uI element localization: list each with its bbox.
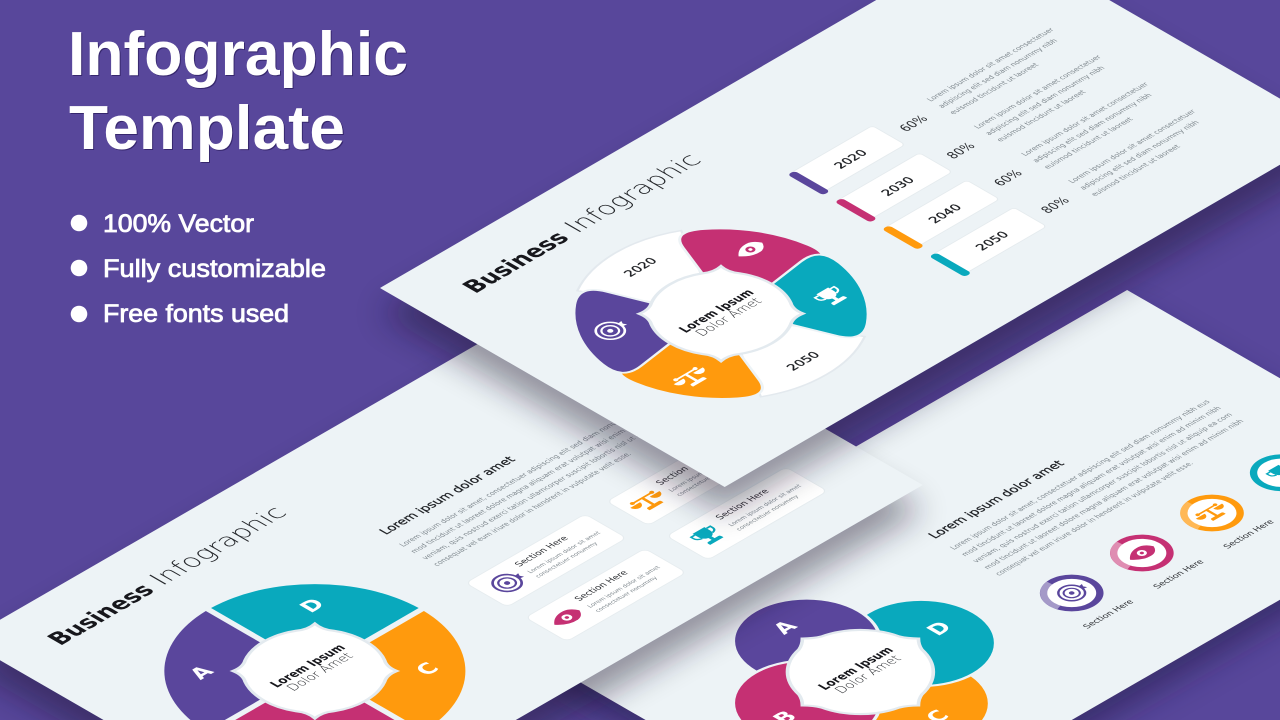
row: 2020 xyxy=(788,25,1082,195)
body text: consequat vel eum iriure dolor in hendrerit in vulputate velit esse. xyxy=(993,460,1196,577)
slide title: Business xyxy=(456,228,576,297)
body text: mod tincidunt ut laoreet dolore magna aliquam erat volutpat wisi enim ad minim nibh xyxy=(408,402,673,555)
feature list: 100% Vector xyxy=(103,210,254,238)
flower diagram: D xyxy=(921,618,957,639)
row: 2050: 80% xyxy=(1038,195,1074,216)
petal: target xyxy=(560,281,688,377)
row: 2050: Lorem ipsum dolor sit amet consectetuer xyxy=(1066,108,1198,184)
card: eye xyxy=(525,548,686,642)
sector wheel xyxy=(102,548,528,720)
row: 2040: Lorem ipsum dolor sit amet consectetuer xyxy=(1019,81,1151,157)
row: 2020: 2020 xyxy=(831,148,871,171)
row: 2020: adipiscing elit sed diam nonummy nibh xyxy=(936,37,1060,109)
row: 2040: euismod tincidunt ut laoreet xyxy=(1042,116,1135,170)
row: 2030: euismod tincidunt ut laoreet xyxy=(994,89,1088,143)
card: target: Section Here xyxy=(513,535,572,569)
row: 2050: euismod tincidunt ut laoreet xyxy=(1089,143,1182,197)
slide: sectors infographic (bottom left) xyxy=(0,286,923,720)
body text: consequat vel eum iriure dolor in hendrerit in vulputate velit esse. xyxy=(431,450,634,568)
petal: scale xyxy=(612,333,778,407)
row: 2040: adipiscing elit sed diam nonummy nibh xyxy=(1030,92,1154,164)
body text: veniam, quis nostrud exerci tation ullamcorper suscipit lobortis nisl ut aliquip ea com xyxy=(420,408,684,561)
sector wheel: Dolor Amet xyxy=(284,651,357,694)
petal wheel xyxy=(500,185,942,442)
slide title xyxy=(39,502,294,649)
ring icon: target: Section Here xyxy=(1081,598,1137,631)
row: 2050: 2050 xyxy=(972,229,1012,252)
row: 2050 xyxy=(929,106,1224,277)
row: 2020: euismod tincidunt ut laoreet xyxy=(947,62,1041,116)
body text: mod tincidunt ut laoreet dolore magna aliquam erat volutpat wisi enim ad minim nibh xyxy=(959,405,1223,558)
body text: veniam, quis nostrud exerci tation ullamcorper suscipit lobortis nisl ut aliquip ea com xyxy=(970,411,1235,564)
card: target xyxy=(466,514,627,607)
feature list xyxy=(71,210,326,328)
ring icon: scale xyxy=(1166,486,1277,550)
feature list: Fully customizable xyxy=(103,255,326,283)
feature list: Free fonts used xyxy=(103,300,289,328)
sector wheel: Lorem Ipsum xyxy=(267,642,350,690)
body text: Lorem ipsum dolor sit amet, consectetuer adipiscing elit sed diam nonummy nibh eus xyxy=(397,395,661,548)
row: 2030: 2030 xyxy=(878,175,918,198)
flower diagram: Dolor Amet xyxy=(832,653,905,696)
slide shadow: bottom right xyxy=(514,310,1280,720)
row: 2030: adipiscing elit sed diam nonummy nibh xyxy=(983,65,1107,136)
ring icon: eye: Section Here xyxy=(1151,558,1207,591)
row: 2040: 2040 xyxy=(925,202,965,225)
slide: flower infographic (bottom right) xyxy=(514,290,1280,720)
card: target: consectetuer nonummy xyxy=(534,541,600,579)
card: trophy: Section Here xyxy=(714,488,773,522)
slide shadow: top xyxy=(380,0,1280,512)
petal wheel: 2020 xyxy=(621,256,660,279)
petal wheel: Lorem Ipsum xyxy=(676,288,758,335)
card: eye: consectetuer nonummy xyxy=(594,575,660,614)
petal wheel: Dolor Amet xyxy=(692,296,766,339)
card: eye: Section Here xyxy=(573,569,631,603)
flower diagram: Lorem Ipsum xyxy=(815,645,898,693)
row: 2030 xyxy=(835,52,1129,223)
flower diagram: A xyxy=(768,617,803,638)
petal: eye xyxy=(664,221,830,294)
ring icon: trophy xyxy=(1236,446,1280,510)
card: scale: consectetuer nonummy xyxy=(675,459,741,498)
flower diagram xyxy=(649,548,1076,720)
card: scale: Lorem ipsum dolor sit amet xyxy=(667,449,744,493)
card: trophy: consectetuer nonummy xyxy=(735,494,801,532)
slide shadow: bottom left xyxy=(0,311,923,720)
ring icon: eye xyxy=(1096,526,1207,590)
heading: Lorem ipsum dolor amet xyxy=(924,458,1067,541)
row: 2030: 80% xyxy=(944,141,979,161)
slide: petal infographic (top) xyxy=(380,0,1280,487)
row: 2030: Lorem ipsum dolor sit amet consectetuer xyxy=(972,53,1104,130)
ring icon: scale: Section Here xyxy=(1222,518,1277,551)
sector wheel: A xyxy=(184,662,219,683)
slide title: Infographic xyxy=(143,502,293,589)
sector wheel: D xyxy=(294,595,330,616)
body text: Lorem ipsum dolor sit amet, consectetuer adipiscing elit sed diam nonummy nibh eus xyxy=(948,398,1212,551)
card: eye: Lorem ipsum dolor sit amet xyxy=(586,565,663,609)
card: scale: Section Here xyxy=(654,453,713,487)
row: 2040: 60% xyxy=(991,168,1026,189)
heading: Lorem ipsum dolor amet xyxy=(375,454,518,537)
card: trophy: Lorem ipsum dolor sit amet xyxy=(727,483,804,528)
card: trophy xyxy=(666,467,828,560)
body text: mod tincidunt ut laoreet dolore magna aliquam erat volutpat wisi enim ad minim nibh xyxy=(982,418,1246,571)
petal: trophy xyxy=(754,250,882,347)
row: 2040 xyxy=(882,79,1176,250)
petal: 2050 xyxy=(707,306,878,405)
title: Infographic xyxy=(68,20,408,89)
row: 2020: 60% xyxy=(897,114,932,134)
row: 2020: Lorem ipsum dolor sit amet consectetuer xyxy=(925,26,1057,103)
sector wheel: C xyxy=(410,659,445,679)
card: scale xyxy=(607,432,768,526)
slide title: Business xyxy=(41,580,161,649)
row: 2050: adipiscing elit sed diam nonummy nibh xyxy=(1077,119,1201,191)
petal wheel: 2050 xyxy=(783,350,823,373)
card: target: Lorem ipsum dolor sit amet xyxy=(526,530,603,575)
title xyxy=(68,20,408,163)
slide title: Infographic xyxy=(557,149,708,237)
title: Template xyxy=(69,94,345,163)
slide title xyxy=(454,149,709,297)
ring icon: target xyxy=(1026,566,1137,630)
petal: 2020 xyxy=(564,223,735,322)
